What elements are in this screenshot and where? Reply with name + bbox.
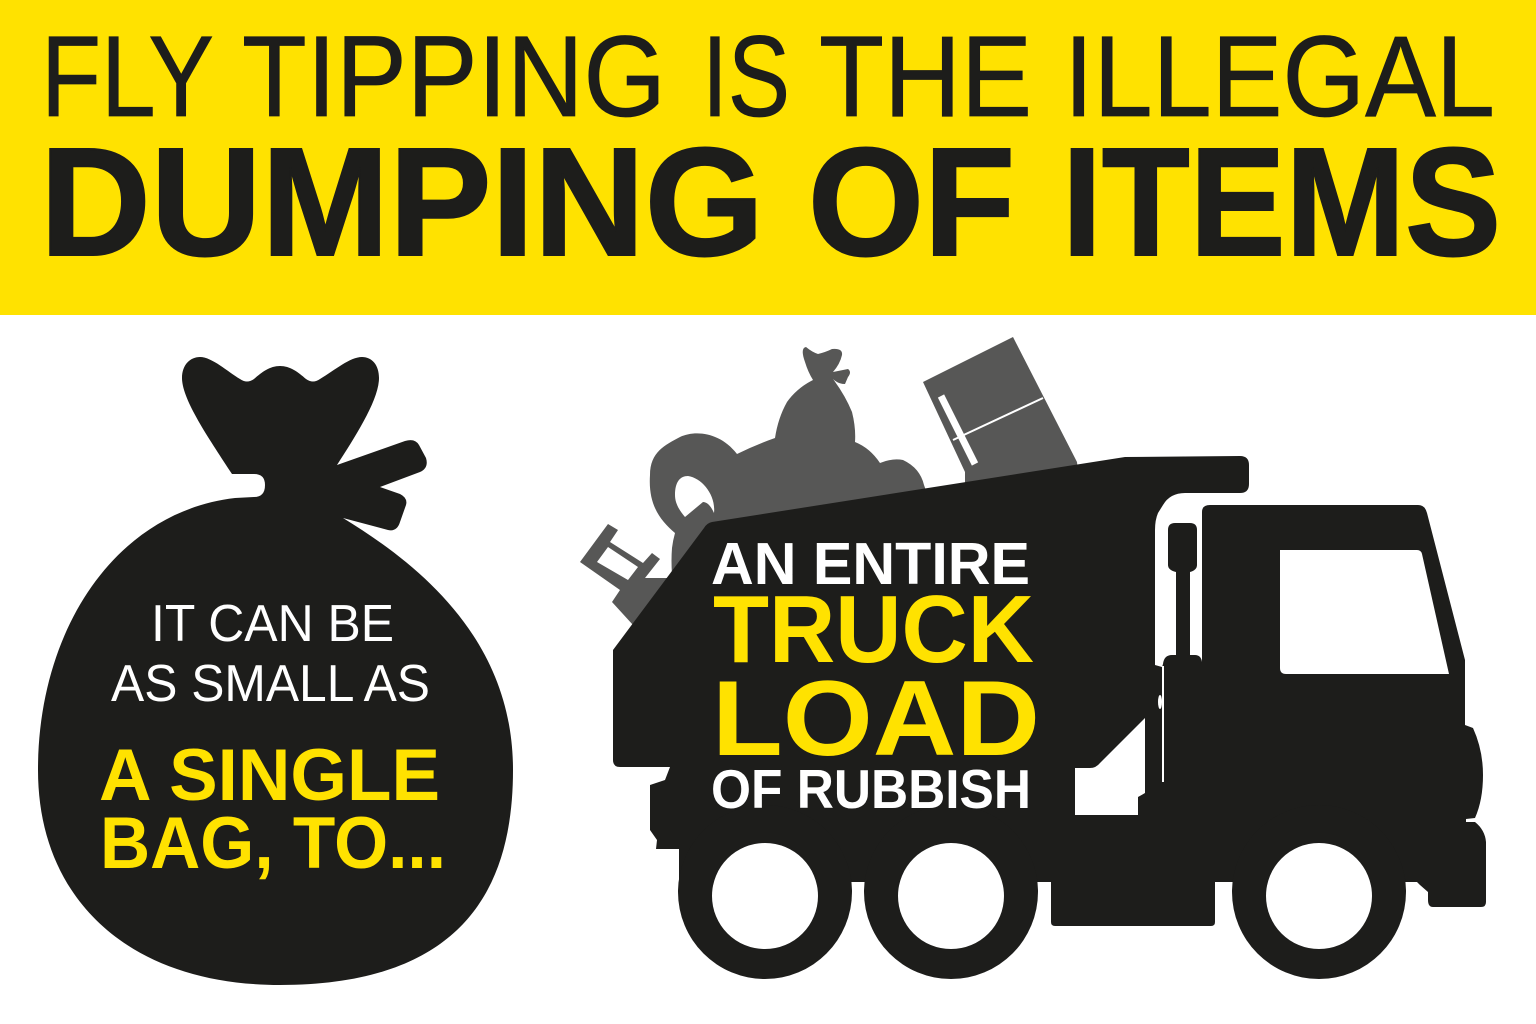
- title line 1: FLY: [41, 13, 214, 141]
- wheel hubs: [712, 843, 818, 949]
- title line 1: ILLEGAL: [1064, 13, 1495, 141]
- gap behind cab: [1075, 718, 1145, 815]
- fridge handle and door line: [941, 396, 1043, 464]
- title line 2: ITEMS: [1062, 116, 1501, 288]
- panel: truck: [580, 337, 1486, 979]
- window: [1280, 550, 1449, 674]
- title line 2: DUMPING: [40, 116, 764, 288]
- truck cut-outs: [712, 550, 1449, 949]
- icon: trolley: [580, 524, 700, 625]
- icon: bag silhouette: [38, 357, 513, 985]
- header banner: [0, 0, 1536, 315]
- title line 1: [41, 13, 1495, 141]
- truck text: highlight: [712, 576, 1040, 778]
- icon: rubbish bag and hoop: [650, 347, 940, 575]
- truck text: highlight: TRUCK: [713, 576, 1034, 683]
- bag text: highlight: [99, 735, 446, 884]
- bag text: highlight: BAG, TO...: [100, 803, 446, 884]
- truck text: white top: AN ENTIRE: [711, 531, 1030, 597]
- rubbish load: [580, 337, 1080, 625]
- title line 2: [40, 116, 1501, 288]
- bag text: small: AS SMALL AS: [111, 655, 430, 713]
- title line 2: OF: [808, 116, 1015, 288]
- bag text: small: IT CAN BE: [151, 595, 394, 653]
- truck text: white bottom: OF RUBBISH: [711, 758, 1031, 820]
- panel: rubbish bag: [38, 357, 513, 985]
- icon: truck silhouette: [613, 456, 1486, 979]
- truck text: highlight: LOAD: [712, 658, 1040, 778]
- title line 1: TIPPING: [242, 13, 666, 141]
- bag text: small: [111, 595, 430, 713]
- icon: fridge: [923, 337, 1080, 490]
- bag text: highlight: A SINGLE: [99, 735, 440, 816]
- title line 1: THE: [819, 13, 1032, 141]
- title line 1: IS: [702, 13, 790, 141]
